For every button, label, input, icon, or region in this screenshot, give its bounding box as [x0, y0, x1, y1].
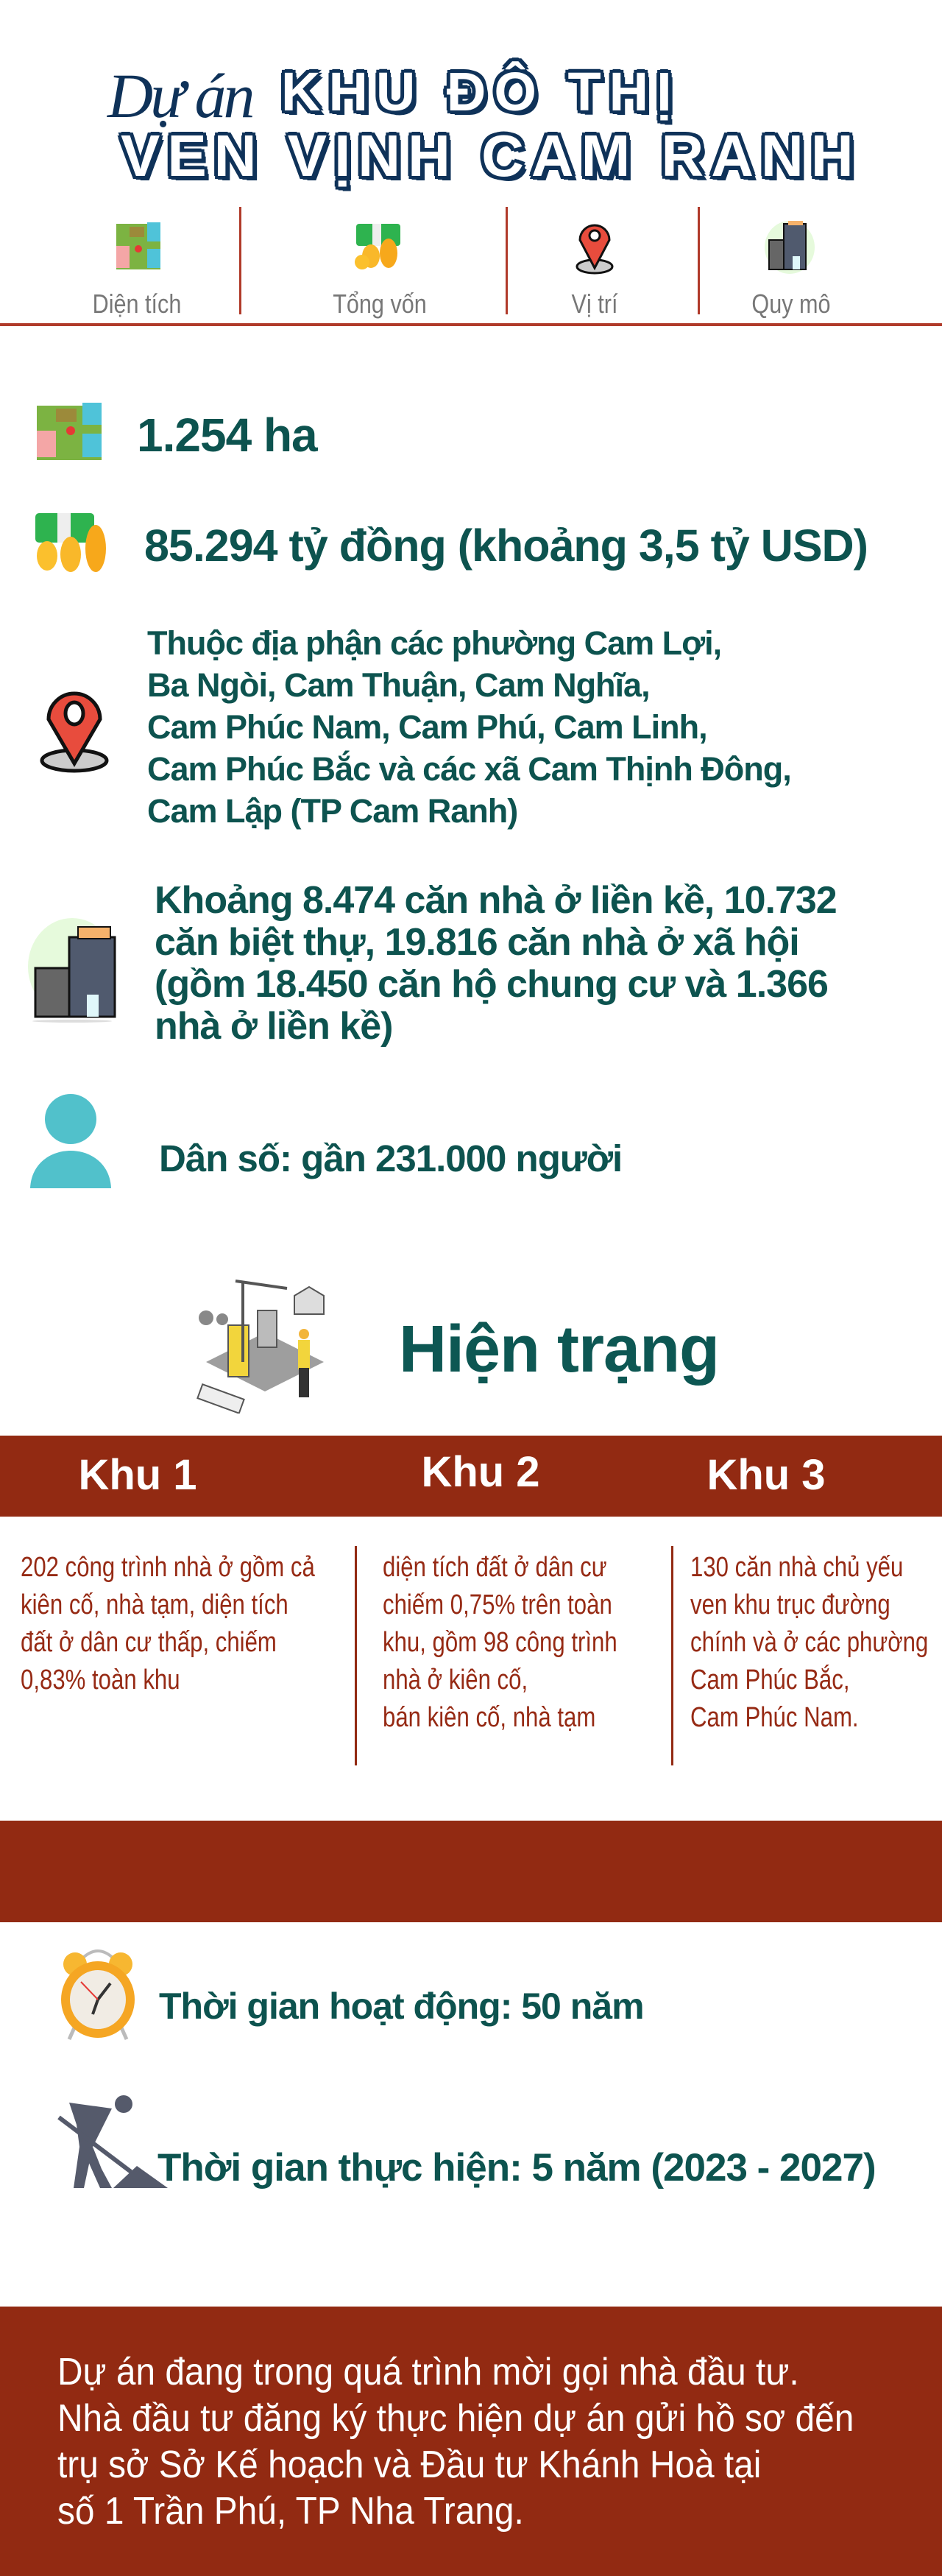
column: Khu 3: 130 căn nhà chủ yếu — [690, 1552, 903, 1583]
hien trang heading — [196, 1280, 719, 1414]
nav: Diện tích: Diện tích — [93, 289, 181, 319]
icon: building — [765, 221, 815, 274]
info: capital: 85.294 tỷ đồng (khoảng 3,5 tỷ USD) — [144, 521, 868, 571]
title line 1: KHU ĐÔ THỊ — [281, 61, 680, 122]
nav: Vị trí: Vị trí — [572, 289, 617, 319]
nav: Diện tích — [93, 222, 181, 319]
column: Khu 3: ven khu trục đường — [690, 1589, 890, 1620]
info: population: Dân số: gần 231.000 người — [159, 1137, 622, 1179]
info: location — [40, 624, 791, 830]
khu header bar: Khu 2 — [421, 1448, 540, 1496]
column: Khu 1 — [21, 1552, 315, 1695]
nav: Quy mô — [751, 221, 831, 319]
footer note: Nhà đầu tư đăng ký thực hiện dự án gửi hồ sơ đến — [57, 2397, 854, 2440]
info: area — [37, 403, 318, 462]
info: scale: Khoảng 8.474 căn nhà ở liền kề, 10.732 — [155, 879, 837, 922]
khu header bar: Khu 3 — [706, 1451, 826, 1499]
icon: map — [116, 222, 160, 269]
column: Khu 2 — [383, 1552, 617, 1733]
column: Khu 2: khu, gồm 98 công trình — [383, 1627, 617, 1658]
nav: Quy mô: Quy mô — [751, 289, 831, 319]
info: area: 1.254 ha — [137, 409, 317, 462]
icon: building — [28, 918, 116, 1023]
info: scale: (gồm 18.450 căn hộ chung cư và 1.366 — [155, 963, 828, 1006]
column: Khu 2: bán kiên cố, nhà tạm — [383, 1702, 595, 1733]
icon: money — [35, 513, 106, 572]
info: location: Thuộc địa phận các phường Cam Lợi, — [147, 624, 721, 662]
column: Khu 3: chính và ở các phường — [690, 1627, 928, 1658]
info: operating time: Thời gian hoạt động: 50 năm — [159, 1986, 644, 2027]
nav: Vị trí — [571, 224, 618, 319]
footer note: trụ sở Sở Kế hoạch và Đầu tư Khánh Hoà tại — [57, 2443, 761, 2486]
icon: person — [30, 1094, 111, 1188]
info: location: Ba Ngòi, Cam Thuận, Cam Nghĩa, — [147, 666, 650, 704]
column: Khu 2: nhà ở kiên cố, — [383, 1665, 528, 1695]
column: Khu 1: đất ở dân cư thấp, chiếm — [21, 1627, 277, 1658]
title script: Dự án: Dự án — [107, 60, 252, 131]
icon: location pin — [40, 692, 109, 773]
column: Khu 1: 202 công trình nhà ở gồm cả — [21, 1552, 315, 1583]
title — [107, 57, 861, 191]
info: location: Cam Phúc Nam, Cam Phú, Cam Linh, — [147, 708, 707, 746]
column: Khu 2: chiếm 0,75% trên toàn — [383, 1589, 612, 1620]
column: Khu 1: 0,83% toàn khu — [21, 1665, 180, 1695]
info: scale: căn biệt thự, 19.816 căn nhà ở xã hội — [155, 921, 799, 964]
column: Khu 3: Cam Phúc Bắc, — [690, 1665, 849, 1695]
icon: construction — [196, 1280, 325, 1414]
khu header bar: Khu 1 — [78, 1451, 197, 1499]
column: Khu 3: Cam Phúc Nam. — [690, 1702, 859, 1733]
info: implementation time — [57, 2095, 876, 2189]
nav: Tổng vốn — [333, 224, 427, 319]
icon: alarm clock — [61, 1949, 135, 2040]
icon: pin — [576, 224, 614, 274]
hien trang heading: Hiện trạng — [399, 1313, 719, 1386]
icon: map — [37, 403, 102, 460]
icon: money — [355, 224, 400, 269]
column: Khu 2: diện tích đất ở dân cư — [383, 1552, 607, 1583]
info: implementation time: Thời gian thực hiện: 5 năm (2023 - 2027) — [157, 2146, 876, 2189]
khu header bar — [0, 1436, 942, 1517]
info: scale: nhà ở liền kề) — [155, 1005, 393, 1048]
nav: Tổng vốn: Tổng vốn — [333, 289, 427, 319]
title line 2: VEN VỊNH CAM RANH — [121, 123, 861, 188]
nav bar — [93, 221, 831, 319]
column: Khu 1: kiên cố, nhà tạm, diện tích — [21, 1589, 288, 1620]
red band — [0, 1821, 942, 1922]
footer note — [0, 2307, 942, 2576]
info: scale — [28, 879, 837, 1048]
info: operating time — [61, 1949, 644, 2040]
icon: worker digging — [57, 2095, 168, 2188]
footer note: số 1 Trần Phú, TP Nha Trang. — [57, 2490, 524, 2533]
column: Khu 3 — [690, 1552, 928, 1733]
info: location: Cam Lập (TP Cam Ranh) — [147, 792, 517, 830]
info: location: Cam Phúc Bắc và các xã Cam Thịnh Đông, — [147, 750, 791, 788]
info: population — [30, 1094, 622, 1188]
footer note: Dự án đang trong quá trình mời gọi nhà đầu tư. — [57, 2351, 799, 2393]
